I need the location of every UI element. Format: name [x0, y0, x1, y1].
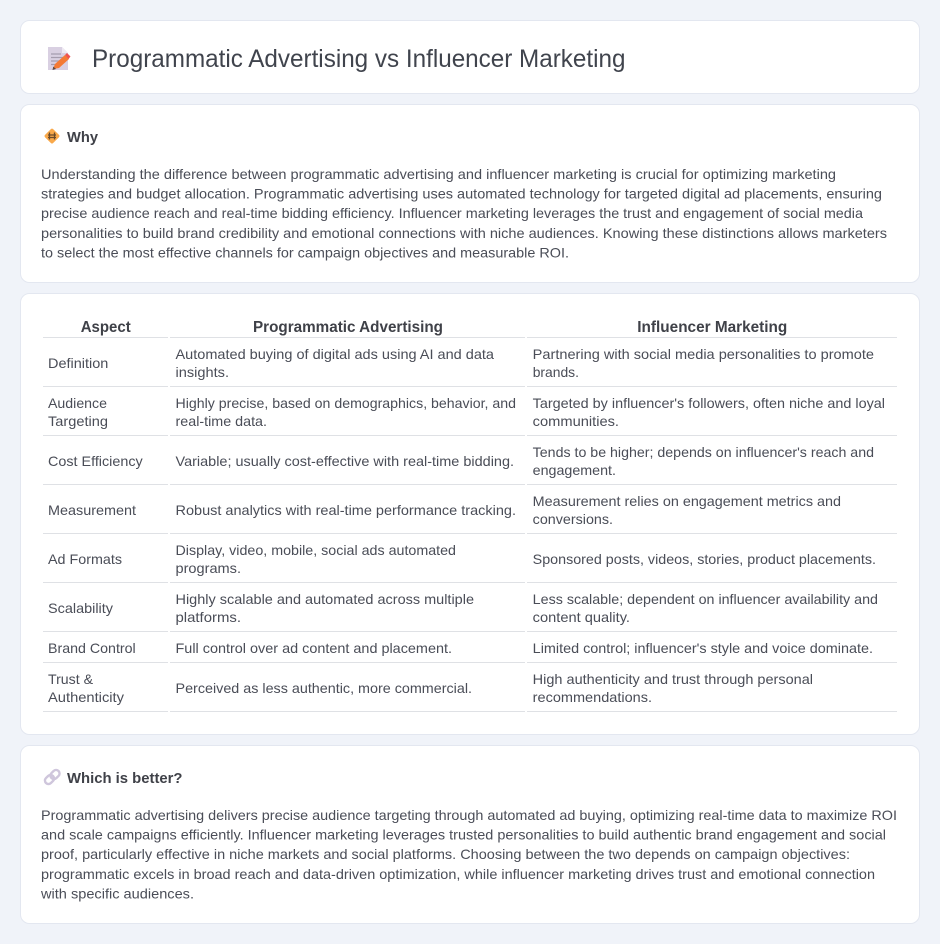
row: trust and authenticity: Authenticity — [48, 689, 124, 705]
row: scalability: Highly scalable and automated across multiple — [176, 591, 474, 607]
panel: which is better — [20, 746, 920, 924]
text block: which is better paragraph — [40, 807, 897, 901]
row: cost efficiency — [43, 444, 897, 484]
row: measurement: Measurement relies on engagement metrics and — [533, 493, 841, 509]
icon: diamond sign — [44, 128, 60, 144]
row: audience targeting: communities. — [533, 413, 619, 429]
row: trust and authenticity: recommendations. — [533, 689, 652, 705]
row: trust and authenticity: Trust & — [48, 671, 94, 687]
row: brand control: Full control over ad content and placement. — [176, 640, 452, 656]
row: audience targeting: Targeted by influencer's followers, often niche and loyal — [533, 395, 885, 411]
row: scalability: content quality. — [533, 609, 630, 625]
row: scalability: Less scalable; dependent on influencer availability and — [533, 591, 878, 607]
text block: why paragraph: personalities to build brand credibility and emotional connections with niche audiences. Knowing these distinctions allows marketers — [41, 225, 887, 241]
row: definition — [43, 346, 897, 386]
text block: why paragraph: strategies and budget allocation. Programmatic advertising uses automated technology for targeted digital ad placements, ensuring — [41, 186, 882, 202]
row: measurement: conversions. — [533, 511, 613, 527]
row: trust and authenticity: High authenticity and trust through personal — [533, 671, 813, 687]
row: ad formats: Ad Formats — [48, 551, 122, 567]
text block: which is better paragraph: programmatic excels in broad reach and data-driven optimization, while influencer marketing drives trust and emotional connection — [41, 866, 875, 882]
row: measurement: Robust analytics with real-time performance tracking. — [176, 502, 516, 518]
title: Programmatic Advertising vs Influencer Marketing — [92, 45, 626, 73]
row: audience targeting: real-time data. — [176, 413, 267, 429]
table header row: Influencer Marketing — [637, 319, 787, 336]
row: measurement: Measurement — [48, 502, 136, 518]
row: definition: Partnering with social media personalities to promote — [533, 346, 874, 362]
text block: why paragraph: Understanding the difference between programmatic advertising and influencer marketing is crucial for optimizing marketing — [41, 166, 836, 182]
row: definition: brands. — [533, 364, 579, 380]
row: cost efficiency: Tends to be higher; depends on influencer's reach and — [533, 444, 874, 460]
text block: which is better paragraph: proof, particularly effective in niche markets and social platforms. Choosing between the two depends on campaign objectives: — [41, 846, 850, 862]
heading: which is better: Which is better? — [67, 770, 182, 787]
row: scalability: platforms. — [176, 609, 241, 625]
row: scalability: Scalability — [48, 600, 113, 616]
text block: why paragraph — [41, 166, 887, 260]
row: cost efficiency: Cost Efficiency — [48, 453, 143, 469]
row: ad formats — [43, 542, 897, 582]
text block: why paragraph: to select the most effective channels for campaign objectives and measurable ROI. — [41, 244, 569, 260]
row: audience targeting: Highly precise, based on demographics, behavior, and — [176, 395, 516, 411]
row: cost efficiency: engagement. — [533, 462, 616, 478]
panel: why — [20, 104, 920, 282]
row: scalability — [43, 591, 897, 632]
row: trust and authenticity: Perceived as less authentic, more commercial. — [176, 680, 472, 696]
row: definition: insights. — [176, 364, 229, 380]
panel: comparison table — [20, 294, 920, 734]
row: brand control: Brand Control — [48, 640, 136, 656]
text block: which is better paragraph: with specific audiences. — [40, 885, 194, 901]
row: audience targeting: Targeting — [48, 413, 108, 429]
icon: document with pencil — [48, 47, 70, 70]
row: ad formats: Display, video, mobile, social ads automated — [176, 542, 456, 558]
icon: chain link — [43, 768, 61, 786]
row: ad formats: programs. — [176, 560, 241, 576]
row: ad formats: Sponsored posts, videos, stories, product placements. — [533, 551, 876, 567]
table header row: Aspect — [81, 319, 131, 336]
row: audience targeting — [43, 395, 897, 436]
text block: why paragraph: precise audience reach and real-time bidding efficiency. Influencer marketing leverages the trust and engagement of social media — [41, 205, 863, 221]
text block: which is better paragraph: Programmatic advertising delivers precise audience targeting through automated ad buying, optimizing real-time data to maximize ROI — [41, 807, 897, 823]
row: cost efficiency: Variable; usually cost-effective with real-time bidding. — [176, 453, 514, 469]
row: audience targeting: Audience — [48, 395, 107, 411]
table header row — [43, 319, 897, 338]
row: measurement — [43, 493, 897, 534]
row: brand control: Limited control; influencer's style and voice dominate. — [533, 640, 873, 656]
row: definition: Definition — [48, 355, 108, 371]
row: brand control — [43, 640, 897, 662]
table header row: Programmatic Advertising — [253, 319, 443, 336]
panel: title header — [20, 20, 920, 94]
row: definition: Automated buying of digital ads using AI and data — [176, 346, 494, 362]
heading: why: Why — [67, 129, 99, 146]
row: trust and authenticity — [43, 671, 897, 712]
text block: which is better paragraph: and scale campaigns efficiently. Influencer marketing leverages trusted personalities to build authentic brand engagement and social — [41, 827, 886, 843]
